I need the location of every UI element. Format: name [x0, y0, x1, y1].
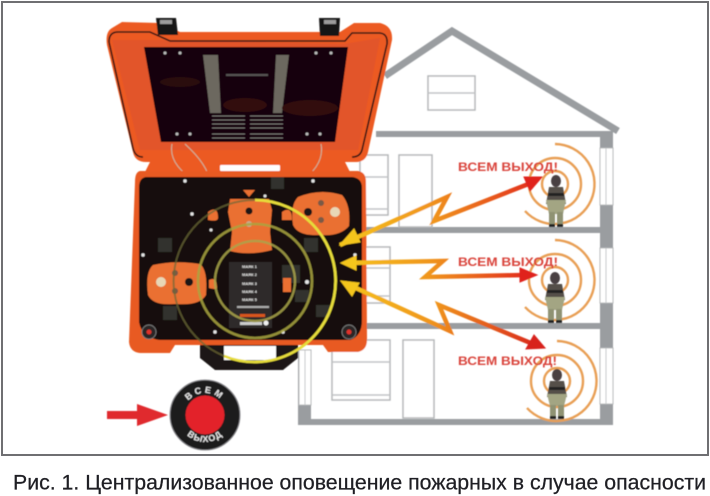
control list panel: МАЯК 4	[242, 289, 258, 294]
lid inner panel	[144, 47, 348, 142]
right wall	[600, 131, 613, 425]
device top right	[292, 192, 349, 235]
case lid	[107, 18, 392, 162]
device left	[147, 262, 206, 304]
arrow floor 3	[341, 281, 545, 349]
small orange tabs	[208, 210, 292, 292]
control list panel: МАЯК 5	[242, 297, 258, 302]
case corner lamps	[142, 325, 356, 339]
label: floor 3 alert: ВСЕМ ВЫХОД!	[458, 354, 557, 368]
hinges	[156, 18, 178, 35]
arrow floor 2	[341, 256, 537, 282]
lid wires	[172, 144, 322, 182]
control list panel: МАЯК 1	[242, 264, 258, 269]
firefighter 2	[545, 272, 565, 323]
lid labels	[226, 74, 268, 76]
red arrow to button	[107, 404, 168, 426]
case connector	[145, 162, 350, 172]
control list panel: МАЯК 2	[242, 272, 258, 277]
device top center	[228, 199, 272, 253]
left wall	[298, 350, 311, 425]
alarm button	[168, 378, 242, 452]
windows and doors	[332, 155, 434, 418]
case base	[129, 171, 367, 353]
lid straps	[203, 55, 221, 113]
attic window	[428, 76, 475, 110]
lid screws	[164, 52, 332, 136]
roof	[385, 31, 618, 131]
arrow floor 1	[340, 177, 542, 245]
handle	[200, 345, 298, 370]
signal rings floor 3	[527, 341, 597, 421]
signal rings floor 2	[525, 240, 595, 320]
label: floor 2 alert: ВСЕМ ВЫХОД!	[458, 255, 558, 269]
signal rings floor 1	[525, 144, 595, 224]
firefighter 1	[546, 175, 566, 227]
button text top: ВСЕМ	[184, 386, 224, 401]
button text bottom: ВЫХОД	[186, 430, 224, 443]
control list panel: МАЯК 3	[242, 281, 258, 286]
caption: Рис. 1. Централизованное оповещение пожарных в случае опасности	[13, 472, 706, 494]
floors	[362, 227, 613, 233]
label: floor 1 alert: ВСЕМ ВЫХОД!	[458, 160, 558, 174]
control list panel	[229, 262, 272, 328]
firefighter 3	[547, 369, 567, 419]
yellow signal rings	[174, 200, 336, 362]
white screws	[141, 179, 357, 334]
dark pads	[158, 177, 330, 320]
house	[298, 31, 618, 425]
